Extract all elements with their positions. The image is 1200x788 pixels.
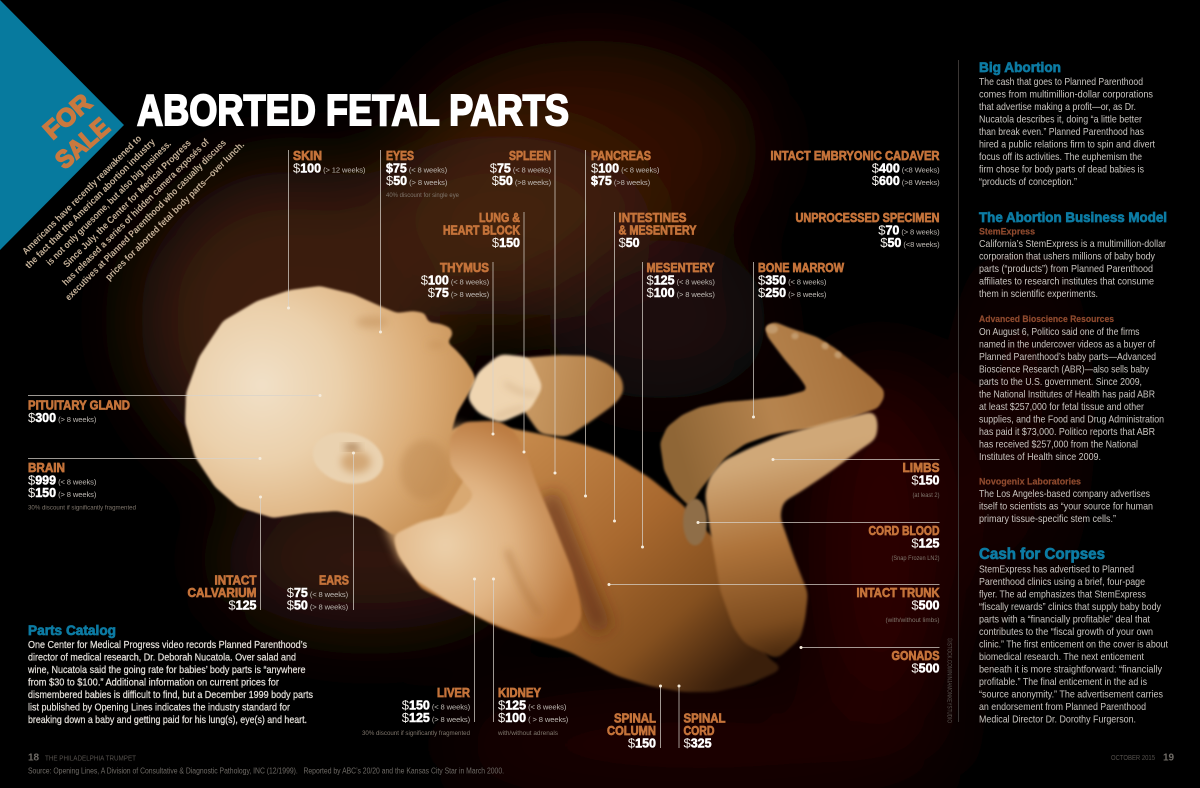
panel: parts catalog (27, 622, 313, 726)
rotated introduction text: the fact that the American abortion industry (23, 136, 157, 270)
label: brain: $999 (< 8 weeks) (28, 472, 97, 488)
subsection: advanced bioscience resources: supplies, and the Food and Drug Administration (979, 414, 1164, 426)
label: mesentery: MESENTERY (646, 261, 715, 275)
near leg (705, 411, 878, 659)
label: thymus: $75 (> 8 weeks) (428, 285, 490, 300)
head and neck (185, 286, 476, 535)
label: pancreas: PANCREAS (591, 149, 651, 163)
facial shading (356, 316, 450, 500)
banner words: for sale (38, 88, 115, 175)
label: thymus: THYMUS (440, 261, 489, 275)
label: pancreas: $100 (< 8 weeks) (591, 160, 660, 176)
label: limbs: $150 (911, 472, 940, 488)
label: lung and heart block: LUNG & (479, 211, 520, 225)
subsection: advanced bioscience resources: Institutes of Health since 2009. (979, 452, 1101, 463)
far leg and foot (660, 322, 884, 507)
panel: cash for corpses: “source anonymity.” The advertisement carries (979, 690, 1163, 700)
footer: left page: Source: Opening Lines, A Division of Consultative & Diagnostic Pathology, INC (12/1999). Reported by ABC’s 20/20 and the Kansas City Star in March 2000. (28, 766, 504, 776)
label: spinal cord: SPINAL (684, 712, 726, 726)
rotated introduction text: executives at Planned Parenthood who casually discuss (63, 137, 228, 302)
label: intact calvarium: INTACT (214, 574, 257, 588)
finger creases (495, 383, 537, 418)
label: intact embryonic cadaver: INTACT EMBRYONIC CADAVER (770, 149, 940, 163)
label: ears: $75 (< 8 weeks) (287, 585, 349, 600)
label: limbs: LIMBS (902, 461, 940, 475)
label: mesentery: $100 (> 8 weeks) (646, 285, 715, 300)
label: lung and heart block: HEART BLOCK (443, 224, 520, 238)
photo: fetus figure (185, 286, 884, 692)
panel: big abortion: The cash that goes to Planned Parenthood (979, 77, 1143, 88)
subsection: advanced bioscience resources: Planned Parenthood’s baby parts—Advanced (979, 352, 1156, 363)
panel: big abortion: firm chose for body parts of dead babies is (979, 164, 1144, 176)
label: intact trunk: $500 (911, 598, 940, 612)
label: unprocessed specimen: UNPROCESSED SPECIMEN (796, 211, 940, 225)
label: bone marrow: $350 (< 8 weeks) (758, 272, 827, 288)
label: eyes: 40% discount for single eye (386, 192, 460, 199)
label: spinal cord: $325 (684, 736, 712, 750)
label: spinal column (607, 684, 662, 750)
panel: parts catalog: Parts Catalog (28, 622, 116, 638)
label: brain: BRAIN (28, 461, 65, 475)
label: kidney: $100 ( > 8 weeks) (498, 710, 569, 725)
label: gonads (800, 646, 940, 676)
panel: cash for corpses: parts with a “financially profitable” deal that (979, 614, 1150, 626)
label: cord blood: $125 (911, 536, 940, 550)
forearm, upper arm and lower hand (393, 421, 582, 639)
upper arm behind fist (520, 355, 624, 437)
label: cord blood: CORD BLOOD (868, 524, 940, 538)
label: pituitary gland: PITUITARY GLAND (28, 398, 130, 412)
label: thymus (421, 261, 494, 436)
panel: cash for corpses: an endorsement from Planned Parenthood (979, 702, 1146, 713)
label: intact trunk (608, 583, 940, 624)
banner words: for sale: FOR (38, 88, 97, 145)
torso (395, 426, 785, 692)
label: skin: $100 (> 12 weeks) (293, 160, 366, 176)
label: intact embryonic cadaver: $400 (<8 Weeks) (872, 160, 940, 176)
label: pancreas (584, 149, 660, 498)
panel: parts catalog: from $30 to $100.” Additional information on current prices for (28, 678, 279, 688)
panel: parts catalog: director of medical research, Dr. Deborah Nucatola. Over salad and (28, 652, 296, 664)
label: intact trunk: (with/without limbs) (886, 617, 940, 624)
panel: big abortion: focus off its activities. The euphemism the (979, 152, 1142, 163)
subsection: stemexpress: them in scientific experiments. (979, 289, 1098, 300)
label: unprocessed specimen (796, 211, 940, 250)
rotated introduction text: has released a series of hidden camera exposés of (60, 136, 212, 287)
panel: cash for corpses: Medical Director Dr. Dorothy Furgerson. (979, 714, 1136, 726)
label: gonads: $500 (911, 660, 940, 676)
label: unprocessed specimen: $70 (> 8 weeks) (878, 222, 940, 238)
rotated introduction text: prices for aborted fetal body parts—over lunch. (103, 139, 246, 282)
upper fist (467, 354, 543, 423)
footer: left page (28, 752, 504, 776)
panel: big abortion: “products of conception.” (979, 177, 1077, 188)
label: kidney: KIDNEY (498, 686, 542, 700)
subsection: novogenix laboratories: The Los Angeles-based company advertises (979, 489, 1150, 500)
subsection: advanced bioscience resources: On August 6, Politico said one of the firms (979, 327, 1140, 338)
panel: cash for corpses: beneath it is more straightforward: “financially (979, 664, 1163, 676)
label: spleen: $75 (< 8 weeks) (490, 160, 552, 176)
panel: parts catalog: list published by Opening Lines indicates the industry standard for (28, 702, 290, 714)
panel: big abortion: comes from multimillion-dollar corporations (979, 90, 1153, 100)
banner words: for sale: SALE (50, 113, 115, 175)
label: gonads: GONADS (892, 649, 940, 663)
label: eyes (379, 149, 460, 334)
label: mesentery: $125 (< 8 weeks) (646, 272, 715, 288)
label: intestines and mesentery (613, 211, 697, 522)
photo credit: ©ISTOCK.COM/NINJAMONKEYSTUDIO (946, 638, 954, 723)
panel: cash for corpses: biomedical research. The next enticement (979, 652, 1144, 663)
label: intact embryonic cadaver: $600 (>8 Weeks) (872, 173, 940, 188)
label: skin (287, 149, 366, 310)
label: brain: $150 (> 8 weeks) (28, 485, 97, 500)
label: spleen: $50 (>8 weeks) (492, 173, 552, 188)
label: intact calvarium: CALVARIUM (188, 586, 256, 600)
panel: parts catalog: dismembered babies is difficult to find, but a December 1999 body parts (28, 690, 313, 701)
label: eyes: $75 (< 8 weeks) (386, 162, 448, 176)
panel: the abortion business model (979, 209, 1167, 525)
panel: cash for corpses: StemExpress has advertised to Planned (979, 564, 1134, 576)
label: spinal column: COLUMN (607, 724, 656, 738)
inner elbow crease (507, 550, 540, 615)
subsection: advanced bioscience resources: has received $257,000 from the National (979, 440, 1138, 450)
label: limbs (772, 458, 940, 499)
left-page triangle banner (0, 0, 124, 250)
footer: left page: THE PHILADELPHIA TRUMPET (45, 754, 136, 762)
panel: big abortion: that advertise making a profit—or, as Dr. (979, 102, 1136, 113)
label: liver: $150 (< 8 weeks) (402, 698, 471, 712)
panel: big abortion: Big Abortion (979, 59, 1061, 75)
panel: parts catalog: wine, Nucatola said the going rate for babies’ body parts is “anywhere (27, 665, 306, 676)
panel: cash for corpses: flyer. The ad emphasizes that StemExpress (979, 590, 1146, 600)
subsection: advanced bioscience resources: Advanced Bioscience Resources (979, 314, 1114, 325)
label: ears (287, 452, 355, 612)
label: spinal cord: CORD (684, 724, 714, 738)
label: eyes: $50 (> 8 weeks) (386, 173, 448, 188)
panel: cash for corpses: Cash for Corpses (979, 546, 1105, 563)
subsection: advanced bioscience resources: Bioscience Research (ABR)—also sells baby (979, 364, 1150, 376)
panel: cash for corpses (979, 546, 1168, 726)
subsection: novogenix laboratories: primary tissue-specific stem cells.” (979, 514, 1116, 525)
subsection: advanced bioscience resources: the National Institutes of Health has paid ABR (979, 390, 1155, 400)
background glow (140, 40, 1070, 788)
panel: cash for corpses: profitable.” The final enticement in the ad is (979, 677, 1147, 688)
subsection: stemexpress: corporation that ushers millions of baby body (979, 252, 1156, 262)
subsection: advanced bioscience resources: has paid it $73,000. Politico reports that ABR (979, 427, 1155, 438)
subsection: novogenix laboratories: itself to scientists as “your source for human (979, 502, 1153, 512)
label: cord blood (696, 521, 940, 562)
panel: parts catalog: One Center for Medical Progress video records Planned Parenthood’s (28, 640, 307, 651)
label: intestines and mesentery: INTESTINES (618, 211, 686, 225)
label: intestines and mesentery: & MESENTERY (618, 224, 697, 238)
panel: cash for corpses: contributes to the “fiscal growth of your own (979, 627, 1153, 638)
label: liver (362, 578, 476, 737)
panel: cash for corpses: clinic.” The first enticement on the cover is about (979, 640, 1168, 650)
label: kidney (492, 578, 569, 737)
label: unprocessed specimen: $50 (<8 weeks) (880, 235, 940, 250)
subsection: stemexpress: parts (“products”) from Planned Parenthood (979, 264, 1153, 275)
label: spinal cord (678, 684, 726, 750)
rotated introduction text: Americans have recently reawakened to (20, 132, 144, 256)
title: ABORTED FETAL PARTS (137, 86, 569, 135)
label: liver: 30% discount if significantly fragmented (362, 730, 471, 737)
subsection: stemexpress: affiliates to research institutes that consume (979, 276, 1154, 288)
label: skin: SKIN (293, 149, 322, 163)
label: cord blood: (Snap Frozen LN2) (892, 555, 940, 562)
footer: right page: OCTOBER 2015 (1111, 753, 1155, 762)
label: pituitary gland: $300 (> 8 weeks) (28, 410, 97, 425)
chest and neck fill (385, 425, 540, 600)
subsection: novogenix laboratories: Novogenix Laboratories (979, 476, 1081, 488)
label: intact calvarium: $125 (228, 598, 257, 612)
panel: big abortion: than break even.” Planned Parenthood has (979, 127, 1144, 138)
label: ears: EARS (319, 574, 349, 588)
label: pancreas: $75 (>8 weeks) (591, 174, 651, 188)
label: intact embryonic cadaver (770, 149, 940, 188)
shadow beside forearm (548, 495, 602, 630)
panel: big abortion: Nucatola describes it, doing “a little better (979, 114, 1142, 126)
panel: the abortion business model: The Abortion Business Model (979, 209, 1167, 225)
label: spleen (490, 149, 556, 474)
label: brain: 30% discount if significantly fragmented (28, 504, 137, 512)
label: bone marrow: $250 (> 8 weeks) (758, 285, 827, 300)
subsection: advanced bioscience resources: named in the undercover videos as a buyer of (979, 340, 1155, 350)
footer: right page: 19 (1163, 752, 1175, 764)
subsection: stemexpress: StemExpress (979, 226, 1035, 238)
label: bone marrow (752, 261, 844, 418)
ear (307, 425, 389, 491)
label: liver: $125 (> 8 weeks) (402, 710, 471, 725)
panel: cash for corpses: “fiscally rewards” clinics that supply baby body (979, 602, 1162, 613)
subsection: advanced bioscience resources (979, 314, 1164, 463)
panel: big abortion: hired a public relations firm to spin and divert (979, 140, 1155, 150)
label: pituitary gland (28, 394, 322, 425)
label: thymus: $100 (< 8 weeks) (421, 272, 490, 288)
label: intestines and mesentery: $50 (618, 235, 640, 250)
panel: parts catalog: breaking down a baby and getting paid for his lung(s), eye(s) and heart. (28, 715, 307, 726)
label: lung and heart block: $150 (492, 235, 520, 250)
label: spinal column: $150 (628, 736, 656, 750)
subsection: novogenix laboratories (979, 476, 1153, 525)
label: intact calvarium (188, 496, 262, 612)
panel: big abortion (979, 59, 1155, 188)
label: eyes: EYES (386, 149, 414, 163)
rotated introduction text: is not only gruesome, but also big business. (44, 138, 173, 267)
panel: cash for corpses: Parenthood clinics using a brief, four-page (979, 577, 1145, 588)
label: intact trunk: INTACT TRUNK (856, 586, 940, 600)
umbilical cord (683, 498, 707, 546)
label: spleen: SPLEEN (509, 149, 551, 163)
label: limbs: (at least 2) (912, 492, 940, 499)
label: lung and heart block (443, 211, 526, 454)
label: kidney: $125 (< 8 weeks) (498, 698, 567, 712)
subsection: advanced bioscience resources: parts to the U.S. government. Since 2009, (979, 377, 1142, 388)
label: kidney: with/without adrenals (497, 730, 558, 737)
subsection: stemexpress: California’s StemExpress is a multimillion-dollar (979, 239, 1166, 250)
footer: left page: 18 (28, 752, 40, 764)
subsection: stemexpress (979, 226, 1166, 300)
label: mesentery (641, 261, 715, 548)
subsection: advanced bioscience resources: at least $257,000 for fetal tissue and other (979, 402, 1144, 413)
label: bone marrow: BONE MARROW (758, 261, 844, 275)
rotated introduction text: Since July, the Center for Medical Progress (61, 137, 193, 269)
label: brain (28, 457, 262, 512)
label: spinal column: SPINAL (614, 712, 656, 726)
label: ears: $50 (> 8 weeks) (287, 598, 349, 612)
label: liver: LIVER (437, 686, 470, 700)
